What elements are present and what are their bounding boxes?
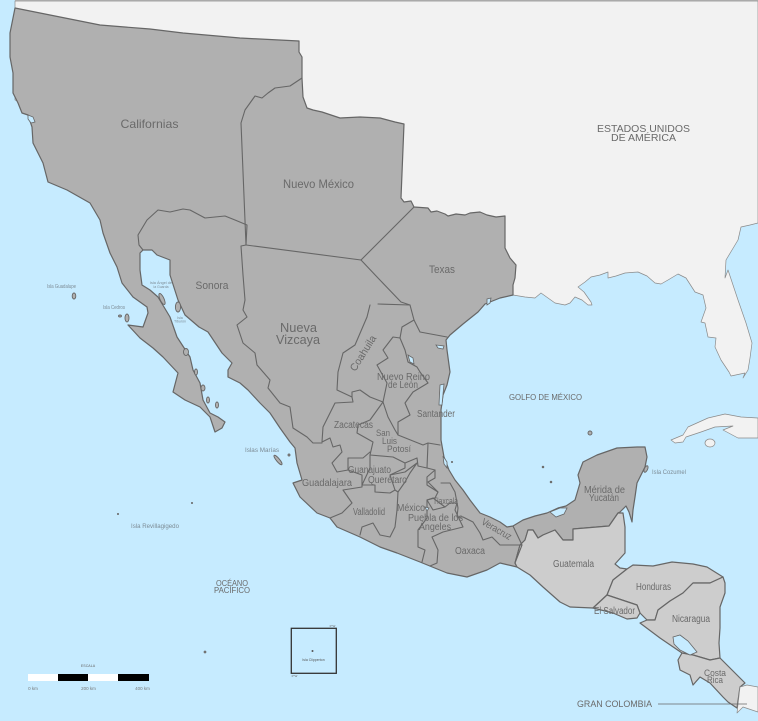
Central America: Honduras <box>607 562 723 620</box>
label: Santander: Santander <box>417 409 456 420</box>
label: Gran Colombia with leader line: GRAN COLOMBIA <box>577 699 653 710</box>
label: Isla Cedros: Isla Cedros <box>103 305 125 311</box>
provincial borders of Mexico <box>138 78 522 566</box>
label: Isla Guadalupe: Isla Guadalupe <box>47 284 76 290</box>
label: Isla Tiburón: Tiburón <box>174 320 186 324</box>
label: Sonora: Sonora <box>196 280 229 292</box>
label: San Luis Potosí: Luis <box>382 436 397 447</box>
label: Puebla de los Ángeles: Ángeles <box>419 520 451 533</box>
Gran Colombia landmass <box>737 685 758 713</box>
United States landmass <box>15 1 758 378</box>
label: Nuevo Reino de León <box>377 372 430 391</box>
label: Querétaro: Querétaro <box>368 475 407 486</box>
label: Estados Unidos de América: DE AMÉRICA <box>611 131 676 144</box>
label: Nuevo México: Nuevo México <box>283 177 354 191</box>
label: San Luis Potosí <box>376 428 411 455</box>
scale bar <box>28 664 150 691</box>
label: Honduras: Honduras <box>636 582 671 593</box>
label: Valladolid: Valladolid <box>353 507 385 518</box>
label: Guanajuato: Guanajuato <box>348 465 391 476</box>
label: Islas Marías: Islas Marías <box>245 447 280 454</box>
scale bar: 400 km <box>135 686 150 691</box>
label: Isla Cozumel: Isla Cozumel <box>652 470 686 476</box>
label: Isla Tiburón: Isla <box>177 316 183 320</box>
label: Nueva Vizcaya: Vizcaya <box>276 332 321 347</box>
label: Isla Ángel de la Guarda: la Guarda <box>154 285 168 289</box>
label: Puebla de los Ángeles <box>408 513 463 533</box>
label: Isla Ángel de la Guarda <box>150 281 172 289</box>
label: Guatemala: Guatemala <box>553 559 594 570</box>
label: Mérida de Yucatán: Mérida de <box>584 485 625 496</box>
Central America: Costa Rica <box>678 653 745 708</box>
label: Nuevo Reino de León: Nuevo Reino <box>377 372 430 383</box>
label: San Luis Potosí: San <box>376 428 390 439</box>
inset: Isla Clipperton: 0°W <box>330 624 336 628</box>
label: Estados Unidos de América <box>597 123 690 144</box>
scale bar: ESCALA <box>81 664 96 668</box>
Lake Nicaragua <box>673 635 697 655</box>
label: Coahuila: Coahuila <box>348 333 379 374</box>
label: Costa Rica: Costa <box>704 668 727 679</box>
label: Costa Rica: Rica <box>707 675 724 686</box>
label: Océano Pacífico: PACÍFICO <box>214 585 250 595</box>
label: Puebla de los Ángeles: Puebla de los <box>408 513 463 524</box>
inset: Isla Clipperton <box>291 624 336 678</box>
Isla de la Juventud <box>705 439 715 447</box>
Cuba <box>671 414 758 443</box>
label: Californias: Californias <box>120 117 178 131</box>
label: Océano Pacífico <box>214 578 250 595</box>
scale bar: 0 km <box>28 686 38 691</box>
label: Nueva Vizcaya: Nueva <box>280 320 318 335</box>
inset: Isla Clipperton: 0°W <box>292 674 298 678</box>
scale bar: 200 km <box>81 686 96 691</box>
label: Golfo de México: GOLFO DE MÉXICO <box>509 393 582 402</box>
label: México: México <box>397 503 425 514</box>
label: Isla Ángel de la Guarda: Isla Ángel de <box>150 281 172 285</box>
label: Tlaxcala: Tlaxcala <box>433 496 458 506</box>
label: Nuevo Reino de León: de León <box>388 380 418 391</box>
label: Nueva Vizcaya <box>276 320 321 347</box>
label: Isla Tiburón <box>174 316 186 324</box>
label: Océano Pacífico: OCÉANO <box>216 578 248 588</box>
label: San Luis Potosí: Potosí <box>387 444 411 455</box>
label: Oaxaca: Oaxaca <box>455 546 485 557</box>
Central America: El Salvador <box>593 595 640 619</box>
Mexico mainland <box>10 8 647 577</box>
label: Zacatecas: Zacatecas <box>334 420 373 431</box>
label: Guadalajara: Guadalajara <box>302 478 352 489</box>
label: Texas: Texas <box>429 264 455 276</box>
inset: Isla Clipperton: Isla Clipperton <box>302 658 325 662</box>
label: Veracruz: Veracruz <box>479 517 513 543</box>
islands <box>72 293 649 653</box>
label: Costa Rica <box>704 668 727 686</box>
label: Estados Unidos de América: ESTADOS UNIDOS <box>597 123 690 135</box>
label: Mérida de Yucatán: Yucatán <box>589 493 619 504</box>
coastal lagoons <box>28 115 567 517</box>
label: El Salvador: El Salvador <box>594 606 636 617</box>
label: Mérida de Yucatán <box>584 485 625 504</box>
top edge of the frame <box>15 0 758 2</box>
Central America: Guatemala <box>515 513 627 608</box>
Central America: Nicaragua <box>640 577 725 660</box>
label: Isla Revillagigedo: Isla Revillagigedo <box>131 523 179 530</box>
label: Nicaragua: Nicaragua <box>672 614 710 625</box>
